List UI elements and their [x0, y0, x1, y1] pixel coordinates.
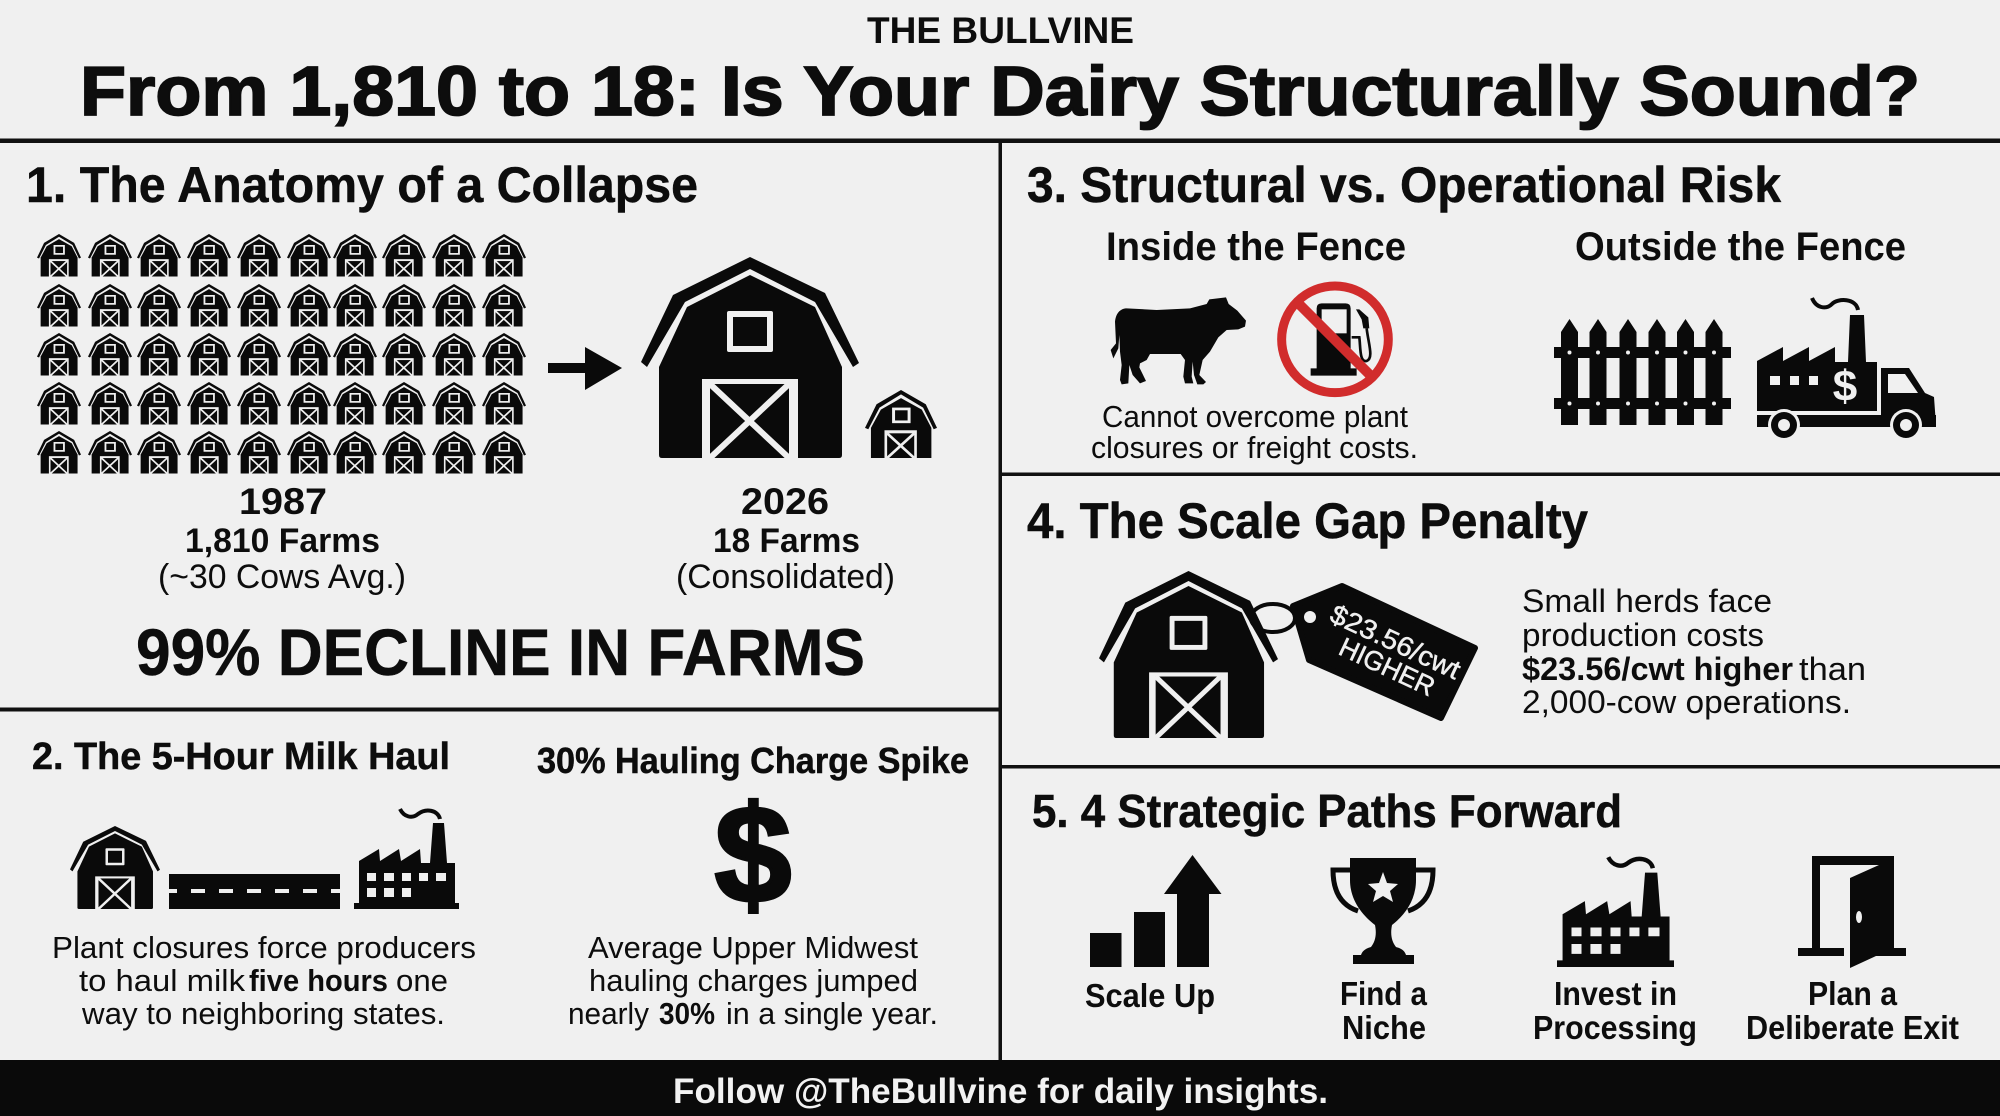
path: invest in processing: Invest in	[1554, 975, 1677, 1012]
icon: factory truck	[1757, 298, 1936, 441]
text: cannot overcome: closures or freight costs.	[1091, 430, 1418, 465]
icon: large barn	[641, 257, 859, 458]
path: scale up: Scale Up	[1085, 977, 1215, 1014]
1987 label: (~30 Cows Avg.)	[158, 558, 406, 596]
text: small herds: production costs	[1522, 617, 1764, 653]
arrow	[548, 347, 622, 390]
icon: barn with price tag: HIGHER	[1334, 632, 1440, 702]
1987 label	[158, 481, 406, 596]
path: invest in processing	[1533, 857, 1697, 1046]
2026 label: 18 Farms	[713, 522, 860, 560]
text: plant closures: five hours	[249, 963, 388, 998]
panel: 1 anatomy of a collapse	[26, 157, 937, 689]
heading 1: 1. The Anatomy of a Collapse	[26, 157, 698, 213]
icon: small barn	[865, 390, 937, 458]
text: hauling charges	[568, 930, 938, 1031]
decline headline: 99% DECLINE IN FARMS	[136, 615, 865, 689]
heading 4: 4. The Scale Gap Penalty	[1027, 493, 1588, 549]
icon: barn	[70, 826, 160, 909]
text: plant closures: one	[396, 963, 448, 998]
path: plan a deliberate exit	[1746, 856, 1959, 1046]
path: plan a deliberate exit: Deliberate Exit	[1746, 1009, 1959, 1046]
2026 label: (Consolidated)	[676, 558, 895, 596]
2026 label	[676, 481, 895, 596]
panel: 4 scale gap penalty	[1027, 493, 1866, 738]
text: hauling charges: Average Upper Midwest	[588, 930, 918, 965]
text: cannot overcome: Cannot overcome plant	[1102, 399, 1408, 434]
text: plant closures: to haul milk	[79, 963, 246, 998]
icon: factory truck: $	[1833, 362, 1857, 411]
icon: fence	[1554, 319, 1731, 425]
heading hauling spike: 30% Hauling Charge Spike	[537, 740, 969, 781]
text: hauling charges: nearly	[568, 996, 649, 1031]
icon: dollar sign: $	[715, 778, 791, 932]
text: small herds: Small herds face	[1522, 583, 1772, 619]
text: small herds: 2,000-cow operations.	[1522, 684, 1851, 720]
text: hauling charges: 30%	[659, 996, 715, 1031]
brand name: THE BULLVINE	[867, 10, 1134, 51]
1987 label: 1987	[239, 481, 327, 522]
text: small herds: $23.56/cwt higher	[1522, 651, 1793, 687]
panel: 3 structural vs operational risk	[1027, 157, 1936, 465]
path: invest in processing: Processing	[1533, 1009, 1697, 1046]
text: plant closures: Plant closures force producers	[52, 930, 476, 965]
icon grid: many small barns 1987	[37, 234, 526, 474]
title: From 1,810 to 18: Is Your Dairy Structurally Sound?	[80, 52, 1920, 130]
2026 label: 2026	[741, 481, 829, 522]
text: small herds	[1522, 583, 1866, 720]
footer bar	[0, 1060, 2000, 1116]
path: find a niche	[1333, 858, 1433, 1046]
heading 3: 3. Structural vs. Operational Risk	[1027, 157, 1781, 213]
panel: 5 strategic paths	[1032, 785, 1959, 1046]
text: hauling charges: hauling charges jumped	[589, 963, 918, 998]
subheading outside: Outside the Fence	[1575, 225, 1906, 269]
icon: barn with price tag: $23.56/cwt	[1326, 599, 1466, 685]
text: plant closures	[52, 930, 476, 1031]
path: find a niche: Niche	[1342, 1009, 1426, 1046]
header	[80, 10, 1920, 130]
panel: 2 milk haul	[32, 736, 969, 1031]
path: find a niche: Find a	[1340, 975, 1428, 1012]
heading 5: 5. 4 Strategic Paths Forward	[1032, 785, 1622, 837]
icon: cow	[1111, 297, 1246, 384]
text: cannot overcome	[1091, 399, 1418, 465]
icon: factory	[354, 809, 459, 909]
heading 2: 2. The 5-Hour Milk Haul	[32, 736, 450, 778]
icon: barn with price tag	[1099, 571, 1475, 738]
subheading inside: Inside the Fence	[1106, 225, 1406, 269]
icon: no fuel sign	[1282, 286, 1388, 393]
icon: road	[169, 874, 340, 909]
path: plan a deliberate exit: Plan a	[1808, 975, 1898, 1012]
1987 label: 1,810 Farms	[185, 522, 380, 560]
text: hauling charges: in a single year.	[726, 996, 938, 1031]
path: scale up	[1085, 855, 1222, 1014]
text: plant closures: way to neighboring states.	[81, 996, 445, 1031]
footer text: Follow @TheBullvine for daily insights.	[673, 1072, 1328, 1111]
text: small herds: than	[1799, 651, 1866, 687]
